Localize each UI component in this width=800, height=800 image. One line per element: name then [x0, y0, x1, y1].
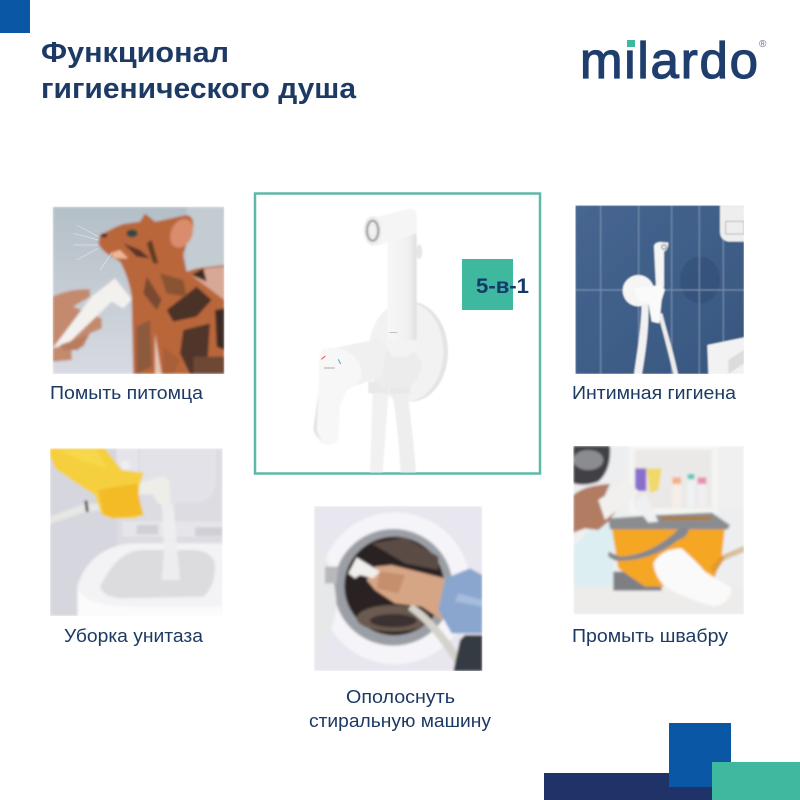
caption: wash pet: Помыть питомца: [50, 383, 204, 403]
corner square: [0, 0, 30, 33]
title: гигиенического душа: [41, 73, 357, 105]
title: Функционал: [41, 37, 229, 69]
caption: rinse washing machine: стиральную машину: [309, 711, 491, 731]
caption: rinse mop: Промыть швабру: [572, 626, 728, 646]
title: [41, 37, 357, 105]
corner shapes bottom right: [544, 723, 800, 800]
photo: cat being washed: [53, 207, 224, 374]
logo: milardo: ®: [759, 39, 767, 50]
photo: cleaning the toilet: [50, 448, 223, 616]
photo: rinsing the washing machine: [314, 506, 482, 671]
product: bidet shower faucet: [313, 209, 448, 473]
caption: toilet cleaning: Уборка унитаза: [64, 626, 204, 646]
badge: 5-в-1: 5-в-1: [476, 275, 529, 298]
caption: intimate hygiene: Интимная гигиена: [572, 383, 737, 403]
badge: 5-в-1: [462, 259, 529, 310]
photo: rinsing the mop: [573, 446, 744, 614]
panel: product frame: [255, 194, 540, 474]
caption: rinse washing machine: Ополоснуть: [346, 687, 455, 707]
photo: intimate hygiene, blue tile wall: [575, 205, 744, 374]
caption: rinse washing machine: [309, 687, 491, 731]
logo: milardo: milardo: [580, 32, 758, 89]
